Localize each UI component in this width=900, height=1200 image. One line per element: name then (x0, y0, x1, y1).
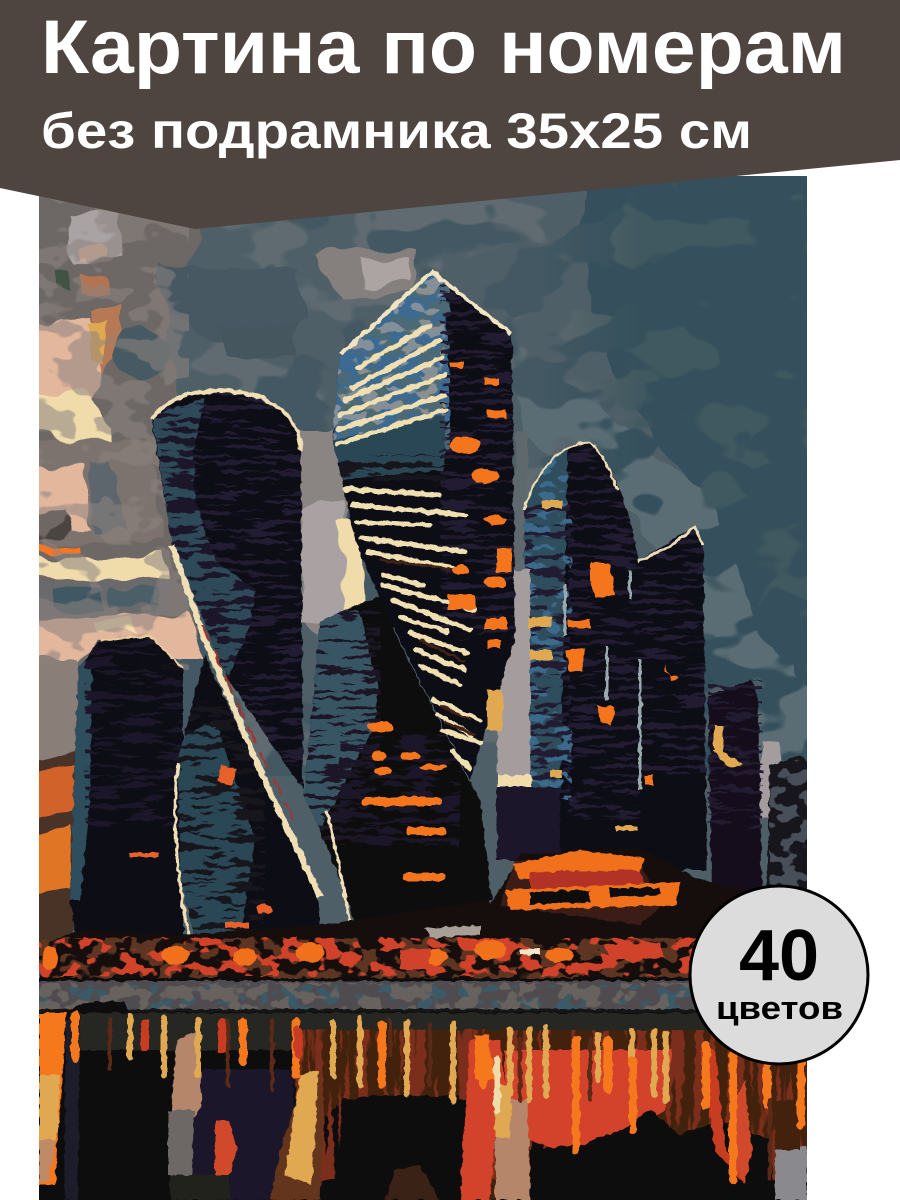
orange windows: central tower (362, 362, 511, 881)
badge: 40 colours: цветов (716, 990, 843, 1026)
orange windows: right towers (565, 562, 680, 785)
tower: curved left, upper (150, 385, 305, 795)
water reflections (30, 1012, 820, 1200)
subtitle: без подрамника 35х25 см (41, 103, 752, 159)
badge: 40 colours (690, 886, 868, 1064)
left orange reflection (39, 1013, 66, 1185)
painting: Moscow City skyline at dusk (20, 160, 830, 1200)
river bank (39, 976, 696, 1014)
vertical light streaks (75, 1016, 801, 1180)
tower: far right block (766, 756, 807, 889)
tower: small right (708, 680, 762, 895)
sky and clouds (39, 176, 807, 978)
bright diagonal edge with red line (172, 545, 320, 897)
tower: central twisted upper (330, 270, 515, 780)
embankment lights (39, 848, 747, 1014)
gap sky between towers (296, 430, 365, 640)
tower: far left block (70, 636, 185, 960)
tower: right pair, rear (636, 526, 708, 870)
tower: central twisted lower (300, 596, 492, 935)
towers (70, 270, 815, 960)
red-orange mass (505, 1050, 672, 1160)
title: Картина по номерам (41, 5, 846, 90)
tower: curved left, lower (175, 655, 320, 950)
badge: 40 colours: 40 (739, 916, 819, 996)
navy and grey reflection (192, 1068, 294, 1200)
window stripes: central tower (338, 325, 481, 768)
brown stripe shadows (380, 560, 475, 735)
gold windows: right towers (487, 500, 743, 831)
header banner (0, 0, 900, 229)
black silhouettes (343, 1094, 466, 1181)
orange windows: left towers (130, 765, 272, 928)
black shapes right (530, 1110, 774, 1181)
tower: right pair, front (497, 440, 643, 860)
